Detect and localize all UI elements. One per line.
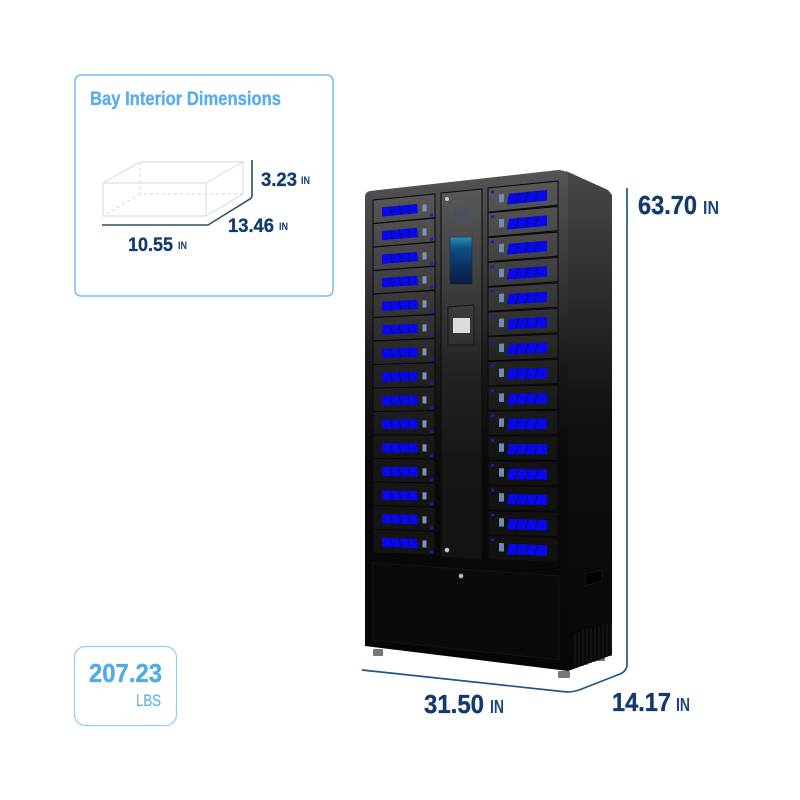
lower storage door <box>373 563 559 660</box>
label: bay depth: 13.46 <box>228 216 274 237</box>
scanner window <box>453 318 470 333</box>
label: cabinet height: IN <box>703 198 719 218</box>
label: bay height: 3.23 <box>261 170 297 191</box>
cabinet front face <box>365 170 568 671</box>
icon: wireframe bay box <box>103 162 243 216</box>
right locker column <box>488 181 558 562</box>
cabinet side face <box>566 171 612 671</box>
label: bay depth: IN <box>279 221 288 233</box>
bottom lock <box>445 548 449 552</box>
side vents <box>575 623 611 668</box>
label: cabinet width: 31.50 <box>424 691 484 719</box>
label: cabinet depth: 14.17 <box>612 689 671 717</box>
label: cabinet width: IN <box>490 697 504 717</box>
locker cabinet <box>365 170 612 678</box>
panel: bay interior dimensions <box>75 75 333 296</box>
panel: weight <box>74 646 176 726</box>
label: bay width: 10.55 <box>128 235 173 256</box>
side handle <box>585 570 602 586</box>
weight unit: LBS <box>136 692 161 710</box>
dimension line: cabinet width, depth and height <box>362 188 627 692</box>
label: bay width: IN <box>178 240 187 252</box>
dimension line: bay <box>102 160 252 225</box>
heading: bay interior dimensions: Bay Interior Dimensions <box>90 89 281 110</box>
label: cabinet depth: IN <box>676 695 690 715</box>
left locker column <box>373 194 435 555</box>
label: bay height: IN <box>301 175 310 187</box>
lower door lock <box>459 574 463 578</box>
top lock <box>445 197 449 201</box>
touch screen <box>450 237 472 284</box>
center control panel <box>441 189 482 560</box>
weight value: 207.23 <box>89 658 162 688</box>
icon: logo <box>454 206 468 221</box>
scanner housing <box>448 305 474 345</box>
cabinet feet <box>373 649 605 678</box>
label: cabinet height: 63.70 <box>638 192 697 220</box>
